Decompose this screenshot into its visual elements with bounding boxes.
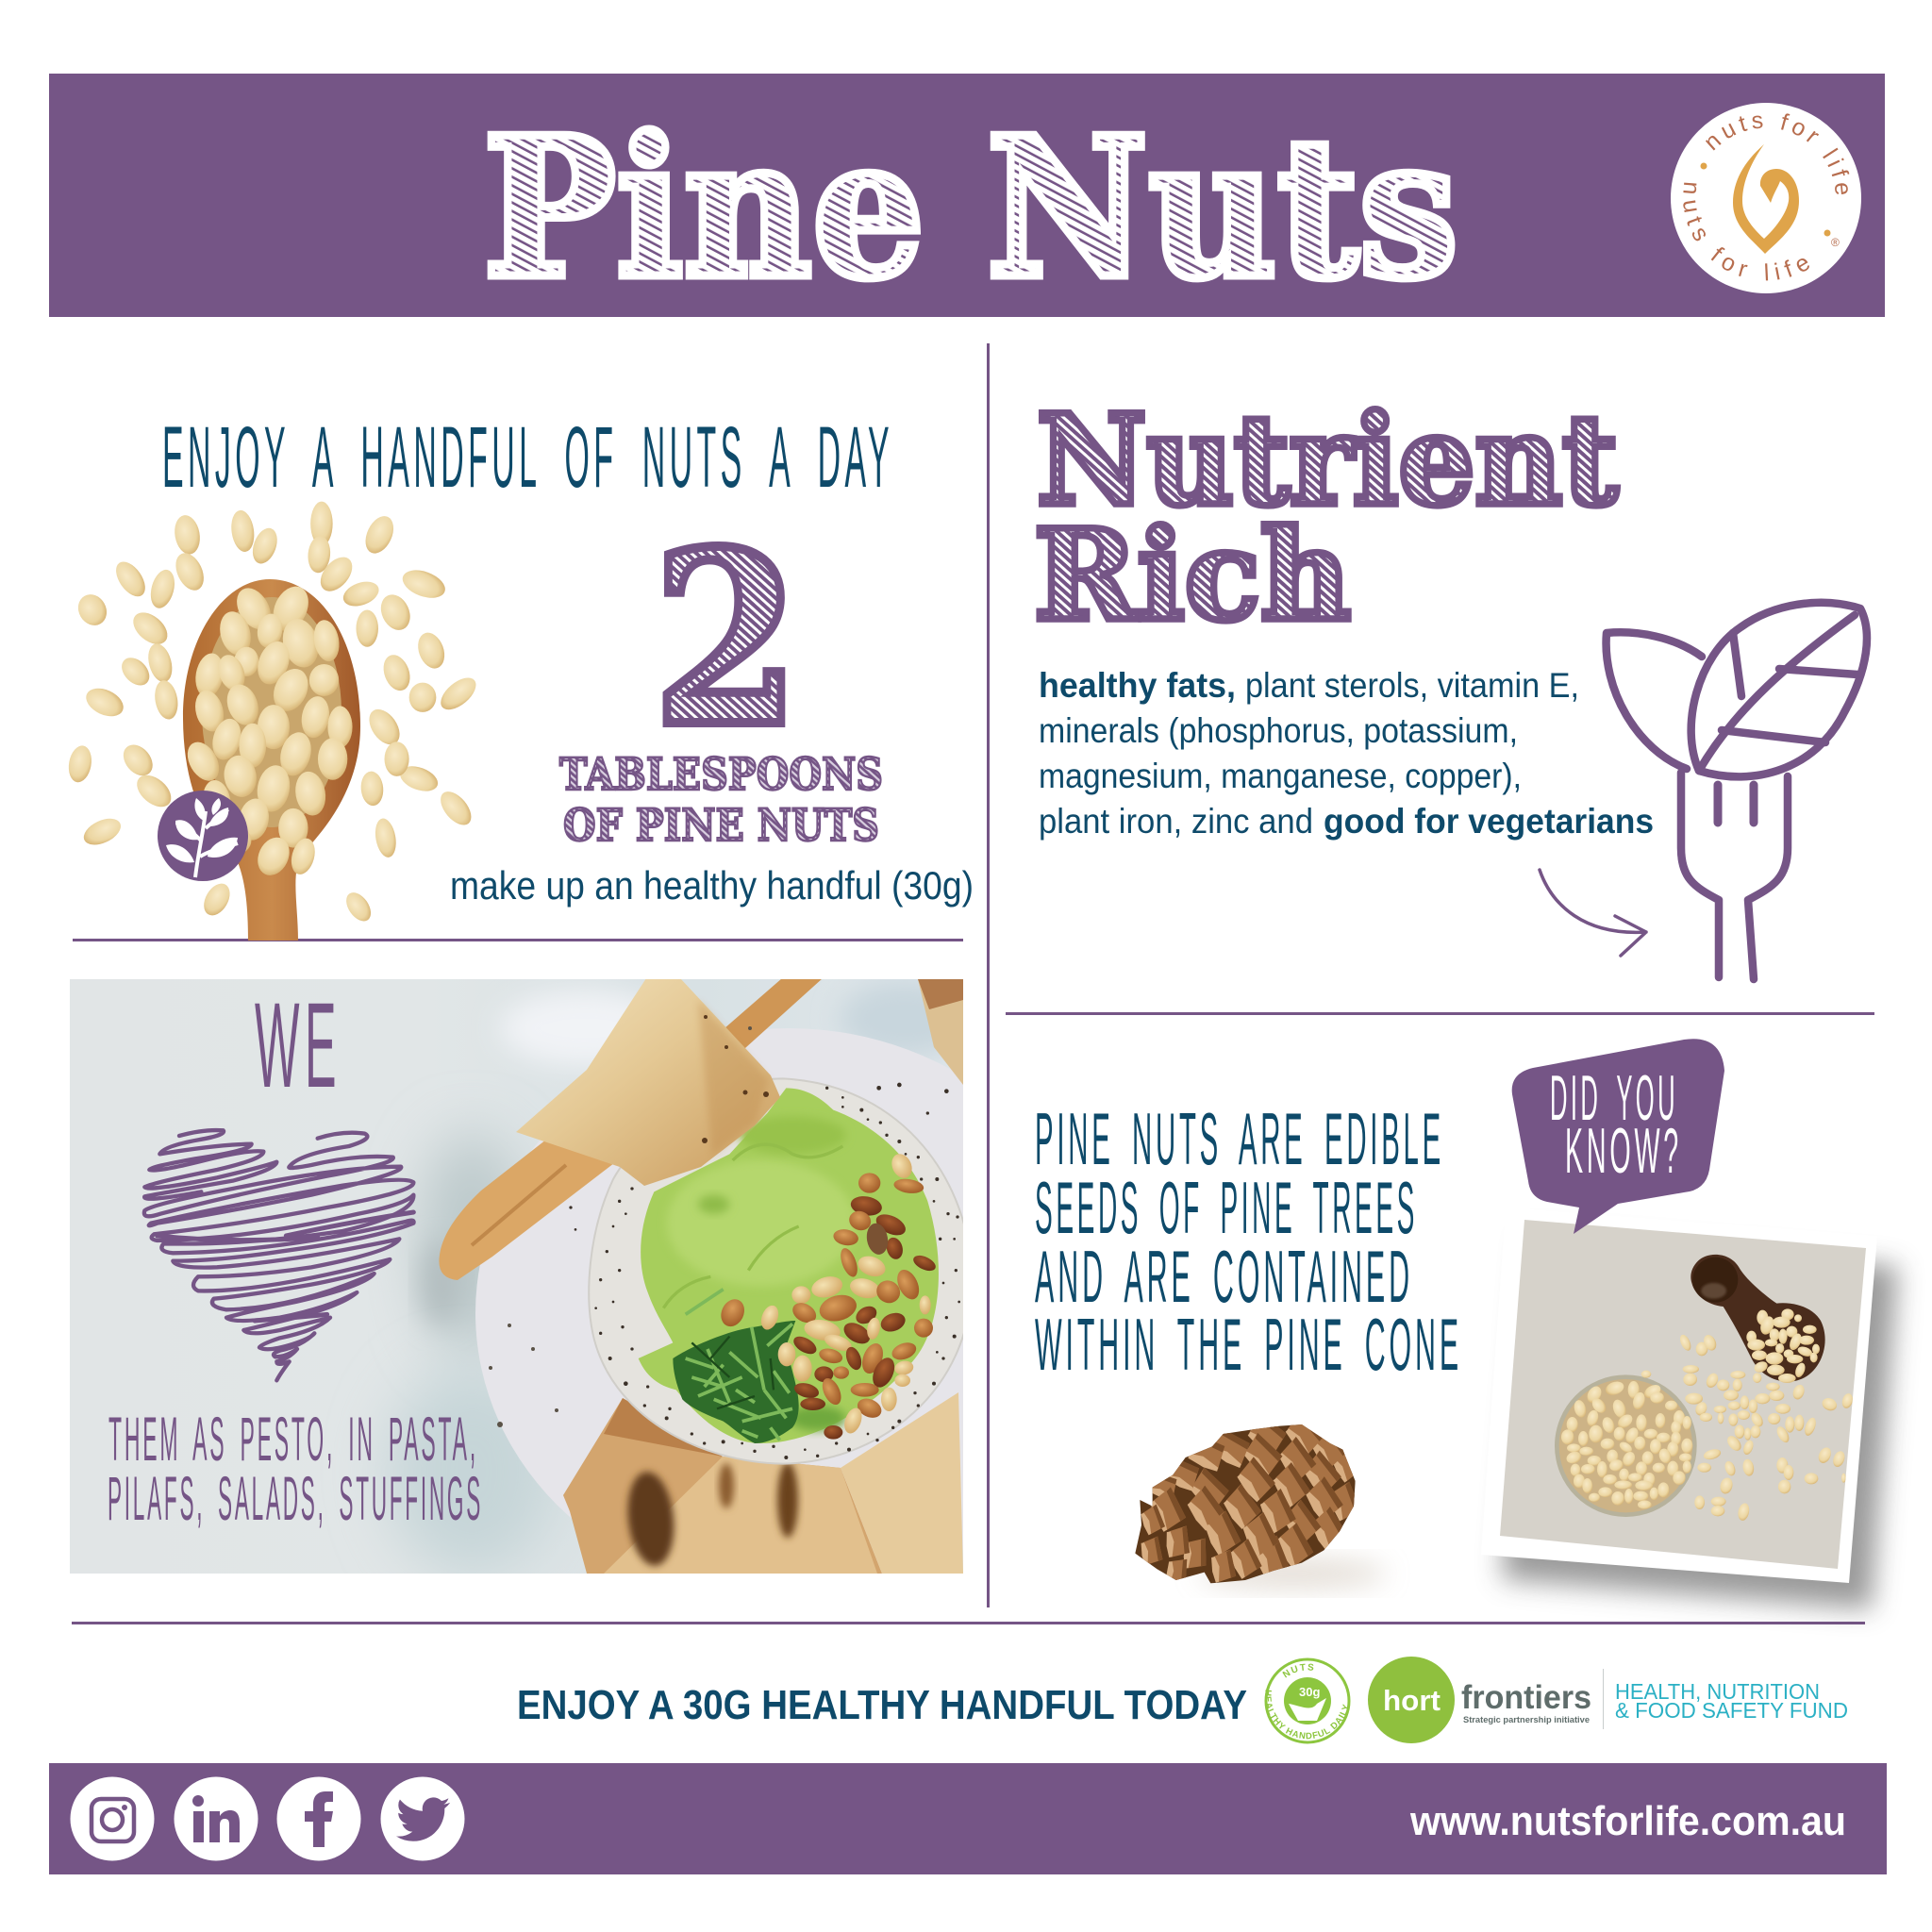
herbs — [673, 1321, 799, 1443]
text: nutrients list: plant iron, zinc and — [1039, 802, 1313, 841]
text: nutrients list — [1039, 666, 1654, 841]
logo: health nutrition fund — [1615, 1679, 1848, 1723]
callout: did you know: KNOW? — [1565, 1115, 1682, 1187]
label: tablespoons of pine nuts: TABLESPOONS — [559, 749, 883, 801]
title: Pine Nuts: Pine Nuts — [483, 95, 1458, 322]
footer bar — [49, 1763, 1887, 1874]
speckles on plate — [489, 1026, 752, 1427]
logo: health nutrition fund: & FOOD SAFETY FUND — [1615, 1698, 1848, 1723]
speckles — [569, 1083, 960, 1459]
photo: spoon of pine nuts — [66, 502, 481, 941]
panel: we love them: PILAFS, SALADS, STUFFINGS — [108, 1463, 483, 1533]
arrow — [1540, 870, 1646, 956]
logo: nuts for life: nuts for life — [1706, 113, 1849, 194]
photo: dip bowl with pita — [70, 979, 963, 1574]
logo: nuts for life: ® — [1831, 236, 1840, 249]
logo: health nutrition fund: HEALTH, NUTRITION — [1615, 1679, 1820, 1704]
bowl, dip and nuts — [569, 1078, 972, 1464]
callout: did you know — [1512, 1039, 1724, 1234]
text: nutrients list: magnesium, manganese, copper), — [1039, 757, 1522, 795]
text: uses — [108, 1404, 483, 1533]
caption: healthy handful: make up an healthy handful (30g) — [450, 863, 974, 908]
logo: healthy handful daily — [1264, 1658, 1351, 1743]
callout: did you know: DID YOU — [1550, 1062, 1678, 1134]
text: nutrients list: minerals (phosphorus, potassium, — [1039, 711, 1518, 750]
panel: did you know — [1035, 1039, 1898, 1609]
logo: hort frontiers — [1368, 1657, 1591, 1743]
pita: lower — [563, 1398, 882, 1574]
logo: healthy handful daily: NUTS — [1282, 1664, 1313, 1677]
pine nuts — [891, 1154, 912, 1178]
text: nutrients list: good for vegetarians — [1324, 802, 1654, 841]
photo card: pine nuts in bowl — [1481, 1208, 1898, 1609]
panel: handful of nuts a day — [66, 409, 974, 941]
logo: healthy handful daily: HEALTHY HANDFUL DAILY — [1264, 1690, 1347, 1740]
text: nutrients list: plant sterols, vitamin E, — [1245, 666, 1579, 705]
panel: nutrient rich — [1034, 388, 1867, 979]
heading: nutrient rich: Rich — [1034, 503, 1351, 649]
numeral 2: 2 — [653, 500, 800, 779]
logo: hort frontiers: frontiers — [1461, 1679, 1591, 1716]
icon: linkedin — [174, 1777, 258, 1860]
panel: we love them: THEM AS PESTO, IN PASTA, — [108, 1404, 478, 1474]
logo: nuts for life — [1671, 103, 1861, 293]
icon: leaves on fork — [1607, 603, 1867, 979]
heading: nutrient rich — [1034, 388, 1618, 649]
panel: we love them: WE — [255, 978, 341, 1113]
logo: nuts for life: nuts for life — [1683, 183, 1809, 281]
photo: pine cone — [1132, 1407, 1387, 1589]
header banner — [49, 74, 1885, 322]
text: pine nut fact — [1035, 1097, 1462, 1386]
text: nutrients list: healthy fats, — [1039, 666, 1236, 705]
logo: hort frontiers: hort — [1383, 1684, 1441, 1717]
label: tablespoons of pine nuts: OF PINE NUTS — [563, 800, 879, 852]
heading: nutrient rich: Nutrient — [1037, 388, 1618, 534]
panel: we love them — [70, 979, 963, 1574]
tagline: ENJOY A 30G HEALTHY HANDFUL TODAY — [517, 1682, 1247, 1728]
website url: www.nutsforlife.com.au — [1409, 1798, 1846, 1844]
logo: healthy handful daily: 30g — [1299, 1685, 1320, 1699]
icon: facebook — [277, 1777, 360, 1860]
icon: plant badge — [158, 791, 248, 881]
label: tablespoons of pine nuts — [559, 749, 883, 852]
logo: hort frontiers: Strategic partnership initiative — [1463, 1715, 1590, 1725]
pita: upper — [516, 978, 780, 1186]
icon: twitter — [381, 1777, 464, 1860]
icon: instagram — [70, 1777, 155, 1860]
icon: scribble heart — [144, 1130, 414, 1380]
